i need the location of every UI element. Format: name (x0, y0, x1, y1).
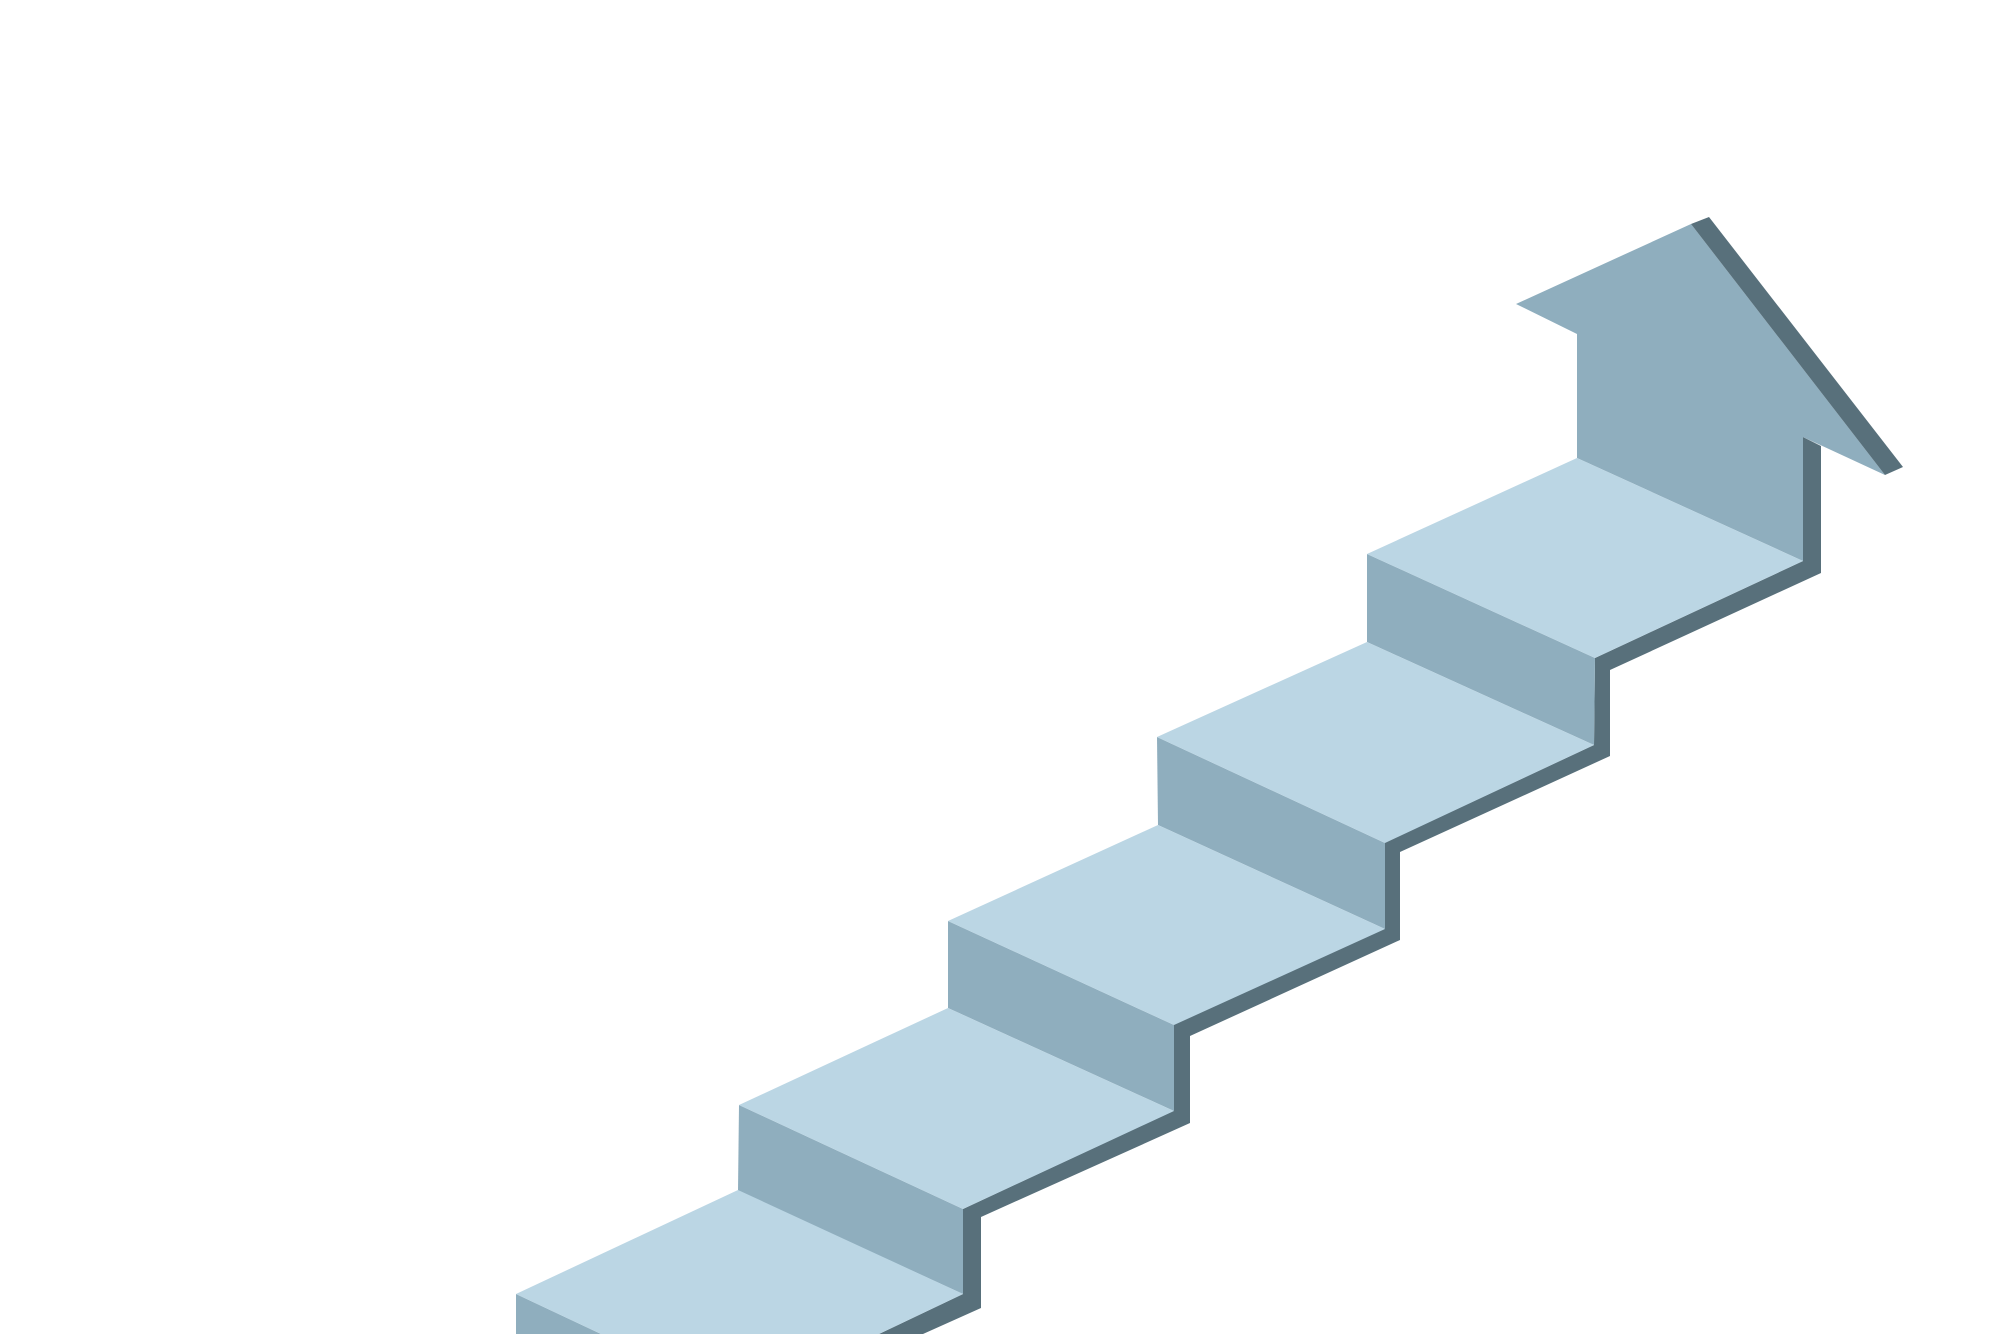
step 2 cropped at the bottom (516, 1190, 963, 1334)
arrow head (1516, 217, 1903, 561)
arrow head dark edge (1691, 217, 1903, 475)
arrow head face (1516, 224, 1885, 561)
step 2 tread (516, 1190, 963, 1334)
step 3 tread (739, 1008, 1174, 1209)
step 6 riser (1367, 554, 1595, 745)
step 4 (948, 825, 1385, 1111)
step 3 (738, 1008, 1174, 1294)
staircase dark side edge (879, 437, 1821, 1334)
step 2 riser (516, 1294, 601, 1334)
step 5 (1157, 642, 1594, 929)
step 4 riser (948, 921, 1174, 1111)
step 4 tread (948, 825, 1385, 1025)
step 3 riser (738, 1105, 963, 1294)
step 5 tread (1157, 642, 1594, 843)
step 6 top (1367, 458, 1803, 745)
step 6 tread (1367, 458, 1803, 658)
step 5 riser (1157, 737, 1385, 929)
